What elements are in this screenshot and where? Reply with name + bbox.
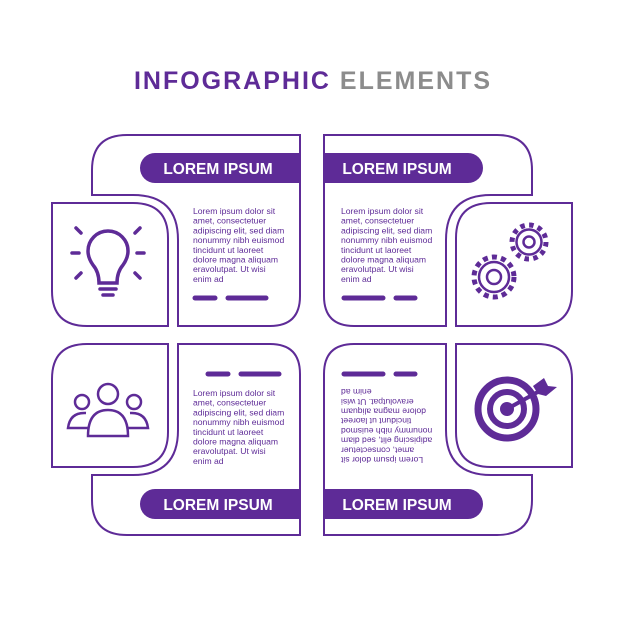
text block: bottom-left: enim ad: [193, 456, 224, 466]
dashes: [195, 298, 415, 374]
header pill: top-right: LOREM IPSUM: [342, 161, 452, 178]
text block: top-right: dolore magna aliquam: [341, 254, 426, 264]
header pill: bottom-left: LOREM IPSUM: [163, 497, 273, 514]
text block: bottom-right upside down: tincidunt ut laoreet: [340, 416, 411, 426]
icon: target: [478, 378, 557, 438]
text block: bottom-left: [193, 388, 284, 466]
text block: top-left: Lorem ipsum dolor sit: [193, 206, 276, 216]
text block: top-left: adipiscing elit, sed diam: [193, 225, 284, 235]
text block: bottom-left: eravolutpat. Ut wisi: [193, 446, 266, 456]
header pill: bottom-left: [140, 489, 300, 519]
text block: top-right: enim ad: [341, 274, 372, 284]
icon: gears: [474, 225, 546, 297]
text block: top-left: dolore magna aliquam: [193, 254, 278, 264]
text block: bottom-left: nonummy nibh euismod: [193, 417, 284, 427]
icon: light bulb: [72, 228, 144, 295]
text block: bottom-right upside down: dolore magna aliquam: [341, 406, 426, 416]
text block: bottom-left: adipiscing elit, sed diam: [193, 407, 284, 417]
panel: bottom-right: [324, 344, 572, 535]
text block: bottom-left: dolore magna aliquam: [193, 436, 278, 446]
text block: top-left: tincidunt ut laoreet: [193, 245, 264, 255]
panel: top-left: [52, 135, 300, 326]
text block: top-left: eravolutpat. Ut wisi: [193, 264, 266, 274]
text block: bottom-right upside down: amet, consectetuer: [341, 445, 414, 455]
text block: top-left: [193, 206, 284, 284]
text block: bottom-right upside down: eravolutpat. Ut wisi: [341, 397, 414, 407]
panel: top-right: [324, 135, 572, 326]
header pill: bottom-right: [324, 489, 483, 519]
header pill: top-left: [140, 153, 300, 183]
text block: top-right: eravolutpat. Ut wisi: [341, 264, 414, 274]
text block: top-right: Lorem ipsum dolor sit: [341, 206, 424, 216]
text block: bottom-left: Lorem ipsum dolor sit: [193, 388, 276, 398]
text block: top-right: amet, consectetuer: [341, 216, 414, 226]
text block: top-left: amet, consectetuer: [193, 216, 266, 226]
text block: bottom-left: tincidunt ut laoreet: [193, 427, 264, 437]
text block: bottom-right upside down: [340, 387, 432, 465]
text block: top-right: adipiscing elit, sed diam: [341, 225, 432, 235]
text block: top-right: nonummy nibh euismod: [341, 235, 432, 245]
title: INFOGRAPHIC ELEMENTS: [134, 67, 492, 95]
header pill: bottom-right: LOREM IPSUM: [342, 497, 452, 514]
text block: bottom-left: amet, consectetuer: [193, 398, 266, 408]
text block: top-left: nonummy nibh euismod: [193, 235, 284, 245]
header pill: top-left: LOREM IPSUM: [163, 161, 273, 178]
header pill: top-right: [324, 153, 483, 183]
text block: top-right: tincidunt ut laoreet: [341, 245, 412, 255]
text block: bottom-right upside down: enim ad: [341, 387, 372, 397]
text block: top-right: [341, 206, 432, 284]
text block: bottom-right upside down: adipiscing elit, sed diam: [341, 436, 432, 446]
text block: top-left: enim ad: [193, 274, 224, 284]
panel: bottom-left: [52, 344, 300, 535]
icon: people: [68, 384, 148, 436]
text block: bottom-right upside down: Lorem ipsum dolor sit: [340, 455, 423, 465]
text block: bottom-right upside down: nonummy nibh euismod: [341, 426, 432, 436]
